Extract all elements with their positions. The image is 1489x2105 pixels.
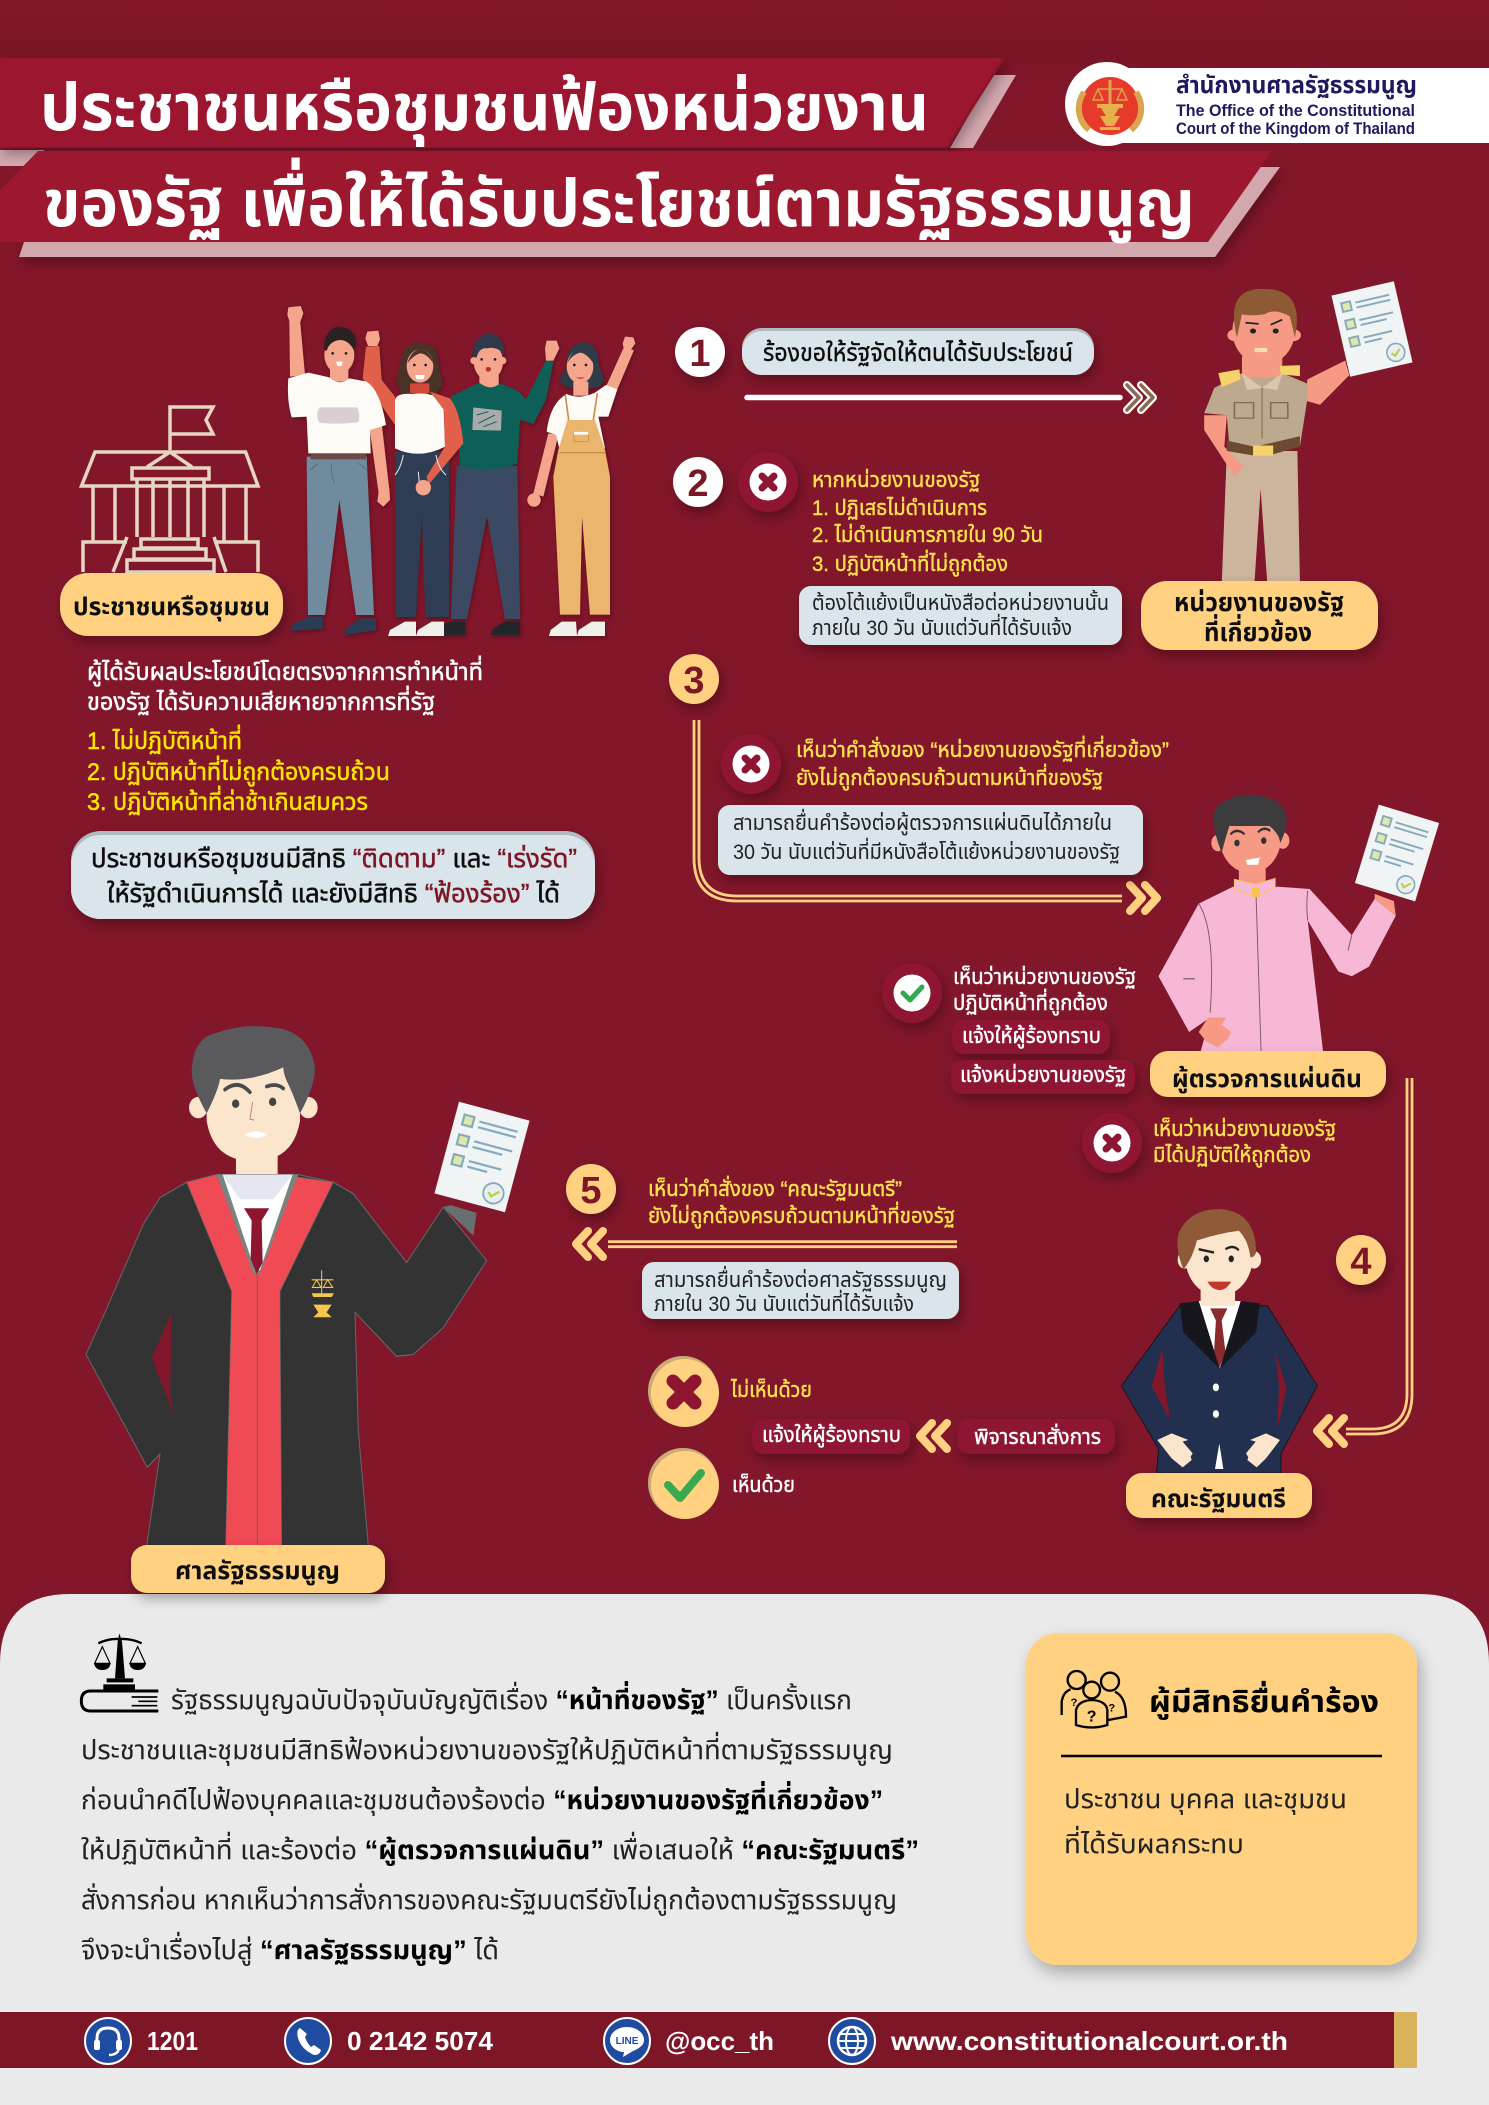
text: agrees finding: เห็นว่าหน่วยงานของรัฐ — [953, 964, 1136, 989]
number 2 — [673, 457, 723, 507]
pill: notify agency: แจ้งหน่วยงานของรัฐ — [960, 1063, 1126, 1087]
pill: request text: ร้องขอให้รัฐจัดให้ตนได้รับประโยชน์ — [763, 339, 1073, 367]
pill: consider order: พิจารณาสั่งการ — [974, 1423, 1101, 1449]
text: step 3 finding: เห็นว่าคำสั่งของ “หน่วยงานของรัฐที่เกี่ยวข้อง” — [796, 735, 1169, 762]
text: step 2 conditions — [812, 468, 1043, 577]
box: step 5 deadline — [642, 1262, 959, 1319]
contact: hotline: 1201 — [147, 2026, 198, 2056]
contact: line: LINE — [616, 2036, 639, 2047]
text block: explanation: สั่งการก่อน หากเห็นว่าการสั่งการของคณะรัฐมนตรียังไม่ถูกต้องตามรัฐธรรมนูญ — [81, 1883, 897, 1916]
pill: request text — [742, 328, 1094, 375]
step 2 — [673, 452, 1122, 645]
arrow: step 4 — [1317, 1078, 1412, 1444]
number 3: 3 — [683, 660, 705, 702]
label: state agency: หน่วยงานของรัฐ — [1174, 587, 1344, 617]
callout: rights of citizens — [71, 831, 595, 919]
text: disagrees finding: เห็นว่าหน่วยงานของรัฐ — [1153, 1116, 1336, 1141]
illustration: state official — [1204, 289, 1349, 581]
illustration: group of citizens — [287, 306, 635, 636]
box: step 5 deadline: สามารถยื่นคำร้องต่อศาลรัฐธรรมนูญ — [654, 1265, 947, 1293]
icon: check agree — [648, 1448, 719, 1519]
text block: explanation: ประชาชนและชุมชนมีสิทธิฟ้องหน่วยงานของรัฐให้ปฏิบัติหน้าที่ตามรัฐธรรมนูญ — [81, 1731, 893, 1766]
text: step 2 conditions: 2. ไม่ดำเนินการภายใน 90 วัน — [812, 523, 1043, 547]
contact: telephone — [285, 2018, 494, 2064]
icon: people with question marks — [1062, 1671, 1126, 1727]
pill: notify petitioner: แจ้งให้ผู้ร้องทราบ — [962, 1024, 1101, 1049]
contact: hotline — [85, 2018, 198, 2064]
box: step 3 deadline: สามารถยื่นคำร้องต่อผู้ตรวจการแผ่นดินได้ภายใน — [733, 808, 1112, 836]
number 4 — [1336, 1235, 1386, 1285]
text: disagrees finding — [1153, 1116, 1336, 1168]
panel heading: ผู้มีสิทธิยื่นคำร้อง — [1149, 1680, 1379, 1720]
pill: consider order — [957, 1419, 1115, 1454]
number 1: 1 — [689, 333, 711, 375]
text: disagrees finding: มิได้ปฏิบัติให้ถูกต้อง — [1153, 1143, 1311, 1168]
text: step 5 finding — [648, 1175, 955, 1229]
pill: notify petitioner — [952, 1020, 1110, 1054]
arrow: step 5 — [576, 1231, 957, 1257]
number 1 — [675, 327, 725, 377]
text block: who is affected — [87, 655, 483, 716]
step 3 — [669, 654, 1169, 911]
number 2: 2 — [687, 463, 709, 505]
text: step 2 conditions: หากหน่วยงานของรัฐ — [812, 468, 980, 492]
text block: who is affected: ของรัฐ ได้รับความเสียหายจากการที่รัฐ — [87, 685, 435, 716]
text: step 5 finding: เห็นว่าคำสั่งของ “คณะรัฐมนตรี” — [648, 1175, 902, 1201]
step 4 — [1317, 1078, 1412, 1444]
paper: ombudsman document — [1355, 805, 1439, 901]
text: agrees finding: ปฏิบัติหน้าที่ถูกต้อง — [953, 988, 1108, 1016]
text: step 2 conditions: 1. ปฏิเสธไม่ดำเนินการ — [812, 496, 987, 520]
text: agrees finding — [953, 964, 1136, 1016]
logo text thai: สำนักงานศาลรัฐธรรมนูญ — [1176, 72, 1417, 100]
icon: scales on book — [81, 1633, 158, 1711]
box: step 2 deadline — [799, 586, 1122, 645]
icon: check badge — [882, 963, 942, 1023]
label: constitutional court: ศาลรัฐธรรมนูญ — [175, 1557, 340, 1586]
text: disagree: ไม่เห็นด้วย — [730, 1377, 812, 1402]
illustration: judge — [86, 1026, 487, 1546]
arrow: step 3 — [694, 720, 1157, 911]
footer contact bar — [0, 2012, 1417, 2068]
contact: telephone: 0 2142 5074 — [347, 2026, 494, 2056]
panel body: ประชาชน บุคคล และชุมชน — [1064, 1784, 1347, 1815]
icon: x badge — [738, 452, 798, 512]
panel body — [1064, 1784, 1347, 1859]
arrow: step 1 — [747, 385, 1153, 410]
text block: explanation: ให้ปฏิบัติหน้าที่ และร้องต่อ “ผู้ตรวจการแผ่นดิน” เพื่อเสนอให้ “คณะรัฐมนตรี” — [81, 1831, 919, 1866]
contact: line: @occ_th — [665, 2026, 774, 2056]
icon: people with question marks: ? — [1087, 1709, 1097, 1726]
logo block — [1065, 62, 1489, 146]
icon: people with question marks: ? — [1108, 1703, 1115, 1715]
contact: website — [829, 2018, 1288, 2064]
list: failures of state duty: 3. ปฏิบัติหน้าที่ล่าช้าเกินสมควร — [87, 785, 368, 816]
text block: explanation: จึงจะนำเรื่องไปสู่ “ศาลรัฐธรรมนูญ” ได้ — [81, 1931, 499, 1966]
title line 2: ของรัฐ เพื่อให้ได้รับประโยชน์ตามรัฐธรรมนูญ — [43, 157, 1195, 243]
number 3 — [669, 654, 719, 704]
label: cabinet: คณะรัฐมนตรี — [1151, 1485, 1286, 1513]
pill: notify agency — [951, 1060, 1135, 1094]
number 5: 5 — [580, 1170, 602, 1212]
icon: people with question marks: ? — [1071, 1697, 1078, 1709]
icon: court seal — [1079, 77, 1141, 135]
step 5 — [566, 1164, 959, 1319]
text block: explanation: ก่อนนำคดีไปฟ้องบุคคลและชุมชนต้องร้องต่อ “หน่วยงานของรัฐที่เกี่ยวข้อง” — [81, 1781, 883, 1816]
text block: explanation: รัฐธรรมนูญฉบับปัจจุบันบัญญัติเรื่อง “หน้าที่ของรัฐ” เป็นครั้งแรก — [171, 1681, 852, 1716]
list: failures of state duty: 1. ไม่ปฏิบัติหน้าที่ — [87, 724, 242, 755]
panel body: ที่ได้รับผลกระทบ — [1064, 1825, 1244, 1859]
label: citizens — [60, 573, 283, 636]
logo text english line 2: Court of the Kingdom of Thailand — [1176, 119, 1415, 138]
person 3: man in green sweater — [435, 333, 559, 635]
pill: notify petitioner: แจ้งให้ผู้ร้องทราบ — [762, 1423, 901, 1448]
text: step 2 conditions: 3. ปฏิบัติหน้าที่ไม่ถูกต้อง — [812, 549, 1008, 577]
label: state agency: ที่เกี่ยวข้อง — [1204, 614, 1312, 647]
label: cabinet — [1126, 1473, 1312, 1518]
arrow: decision chevron — [920, 1423, 947, 1449]
box: step 2 deadline: ภายใน 30 วัน นับแต่วันที่ได้รับแจ้ง — [812, 613, 1072, 640]
logo text english line 1: The Office of the Constitutional — [1176, 101, 1415, 120]
callout: rights of citizens: ประชาชนหรือชุมชนมีสิทธิ “ติดตาม” และ “เร่งรัด” — [91, 843, 577, 874]
title banner — [0, 58, 1280, 257]
text: step 5 finding: ยังไม่ถูกต้องครบถ้วนตามหน้าที่ของรัฐ — [648, 1201, 955, 1229]
number 5 — [566, 1164, 616, 1214]
callout: rights of citizens: ให้รัฐดำเนินการได้ และยังมีสิทธิ “ฟ้องร้อง” ได้ — [107, 878, 560, 908]
step 1 — [675, 327, 1153, 410]
text block: explanation — [81, 1681, 919, 1966]
icon: x badge — [721, 734, 781, 794]
text: agree: เห็นด้วย — [732, 1472, 795, 1497]
label: ombudsman — [1150, 1051, 1386, 1097]
icon: x disagree — [648, 1356, 719, 1427]
bottom panel — [0, 1594, 1489, 2105]
ombudsman: disagrees — [1082, 1113, 1336, 1173]
person 4: woman in overalls — [527, 337, 635, 636]
person 2: woman with orange sleeves — [363, 331, 463, 636]
box: step 2 deadline: ต้องโต้แย้งเป็นหนังสือต่อหน่วยงานนั้น — [812, 589, 1109, 615]
label: citizens: ประชาชนหรือชุมชน — [73, 593, 270, 622]
box: step 3 deadline: 30 วัน นับแต่วันที่มีหนังสือโต้แย้งหน่วยงานของรัฐ — [733, 837, 1120, 864]
icon: government building — [82, 407, 258, 572]
label: ombudsman: ผู้ตรวจการแผ่นดิน — [1172, 1065, 1362, 1094]
illustration: cabinet minister — [1121, 1209, 1317, 1473]
contact: line — [604, 2018, 774, 2064]
contact: website: www.constitutionalcourt.or.th — [890, 2026, 1288, 2056]
text: step 3 finding: ยังไม่ถูกต้องครบถ้วนตามหน้าที่ของรัฐ — [796, 763, 1103, 791]
text: step 3 finding — [796, 735, 1169, 791]
paper: judge document — [434, 1102, 530, 1212]
ombudsman: agrees — [882, 963, 1136, 1094]
paper: official document — [1331, 281, 1413, 377]
list: failures of state duty — [87, 724, 390, 816]
panel: who may petition — [1026, 1633, 1417, 1965]
list: failures of state duty: 2. ปฏิบัติหน้าที่ไม่ถูกต้องครบถ้วน — [87, 755, 390, 787]
illustration: ombudsman — [1159, 795, 1396, 1051]
box: step 3 deadline — [718, 805, 1143, 875]
pill: notify petitioner — [752, 1419, 910, 1454]
number 4: 4 — [1350, 1241, 1372, 1283]
cabinet decision — [648, 1356, 1115, 1519]
label: constitutional court — [131, 1545, 385, 1593]
text block: who is affected: ผู้ได้รับผลประโยชน์โดยตรงจากการทำหน้าที่ — [87, 655, 483, 687]
label: state agency — [1141, 581, 1378, 650]
title line 1: ประชาชนหรือชุมชนฟ้องหน่วยงาน — [40, 70, 929, 147]
icon: x badge — [1082, 1113, 1142, 1173]
box: step 5 deadline: ภายใน 30 วัน นับแต่วันที่ได้รับแจ้ง — [654, 1289, 914, 1316]
person 1: man in white t-shirt — [287, 306, 390, 635]
